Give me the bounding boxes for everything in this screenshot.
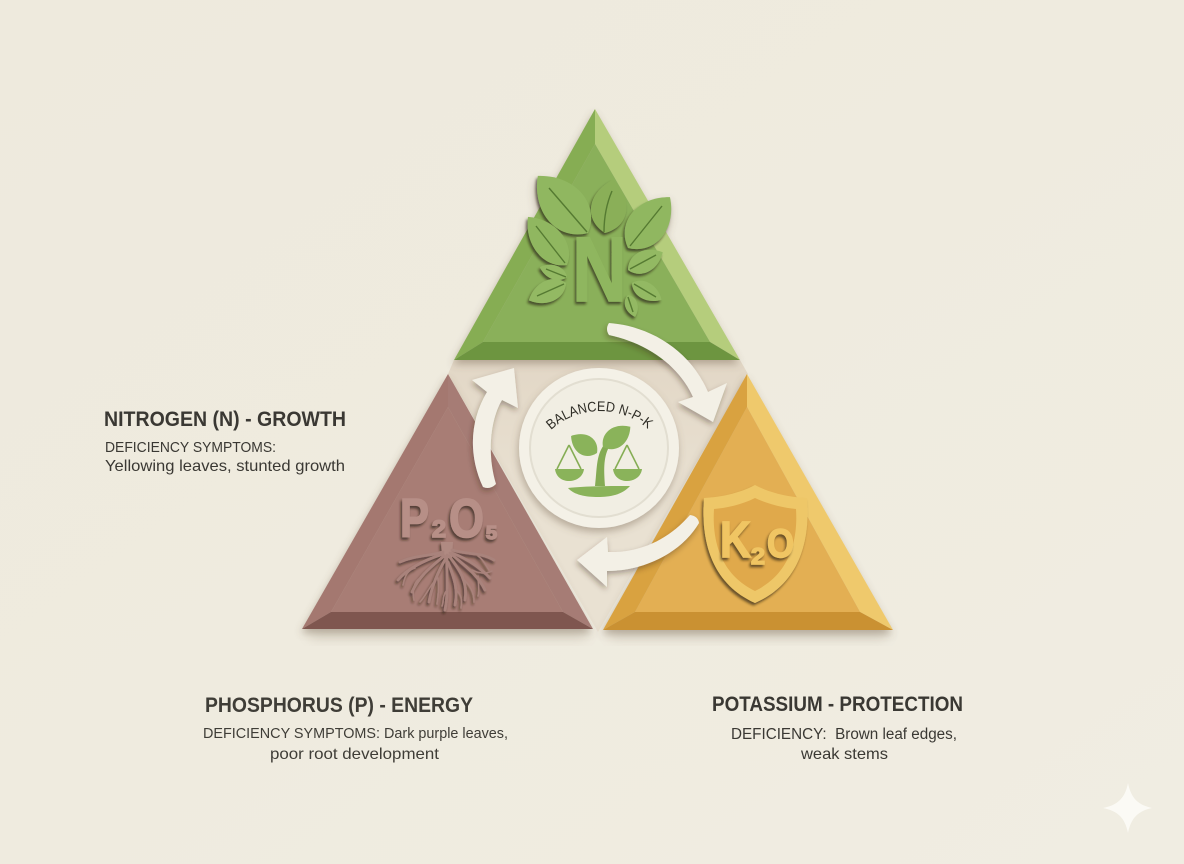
arrow: nitrogen to potassium (607, 323, 727, 422)
formula K2O: K (720, 511, 751, 568)
icon: shield (703, 485, 808, 603)
text block: potassium: weak stems (800, 746, 888, 763)
text block: phosphorus: PHOSPHORUS (P) - ENERGY (205, 694, 473, 717)
icon: plant scale (555, 419, 642, 497)
triangle ground shadows (310, 630, 886, 638)
formula K2O: O (767, 522, 794, 566)
text block: phosphorus: poor root development (270, 746, 440, 763)
text block: nitrogen: Yellowing leaves, stunted growth (105, 458, 345, 475)
leaf veins (536, 188, 662, 312)
letter N: N (572, 219, 627, 321)
icon: roots (398, 542, 494, 610)
panel: phosphorus triangle (302, 374, 593, 629)
central recessed panel (448, 360, 748, 632)
arrow: phosphorus to nitrogen (472, 368, 518, 488)
badge label: BALANCED N-P-K (546, 401, 654, 430)
icon: leaves (516, 162, 685, 319)
center badge (514, 368, 682, 536)
arrow: potassium to phosphorus (577, 515, 699, 587)
text block: nitrogen: NITROGEN (N) - GROWTH (104, 408, 346, 431)
formula P2O5: 2 (432, 516, 446, 543)
panel: nitrogen triangle (454, 109, 740, 360)
formula P2O5: 5 (486, 523, 497, 543)
text block: potassium: POTASSIUM - PROTECTION (712, 693, 963, 716)
panel: potassium triangle (603, 374, 893, 630)
formula K2O (720, 511, 794, 569)
formula P2O5: P (400, 487, 429, 549)
text block: potassium (712, 693, 963, 763)
text block: potassium: DEFICIENCY: Brown leaf edges, (731, 726, 957, 743)
text block: phosphorus (203, 694, 508, 763)
formula P2O5 (400, 487, 497, 549)
formula K2O: 2 (751, 543, 765, 569)
text block: nitrogen (104, 408, 346, 475)
icon: sparkle (1103, 783, 1152, 833)
text block: phosphorus: DEFICIENCY SYMPTOMS: Dark purple leaves, (203, 725, 508, 742)
formula P2O5: O (449, 487, 484, 549)
text block: nitrogen: DEFICIENCY SYMPTOMS: (105, 439, 276, 456)
